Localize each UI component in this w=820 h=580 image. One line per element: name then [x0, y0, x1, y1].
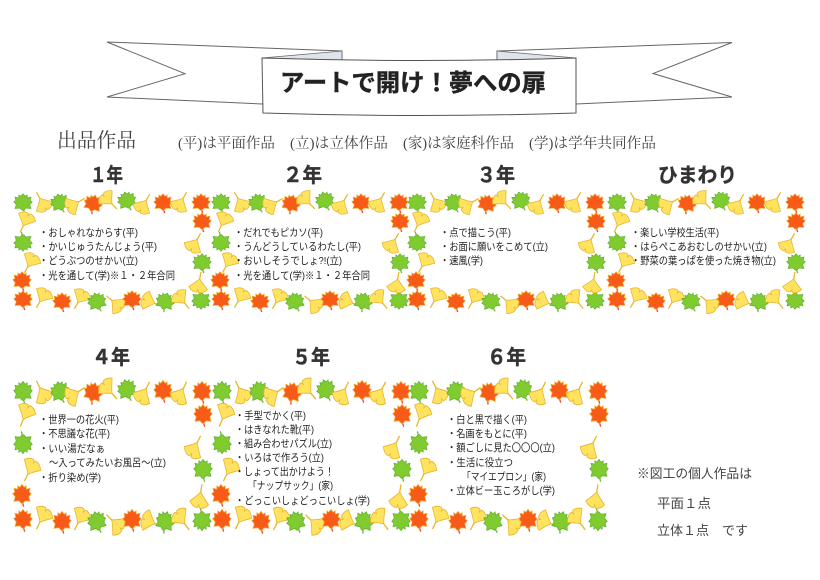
panel: 4年 — [12, 346, 212, 538]
work list: ・おしゃれなからす(平) — [39, 227, 138, 239]
banner front panel — [262, 58, 576, 116]
heading: ４年 — [92, 346, 130, 369]
work list: ～入ってみたいお風呂～(立) — [49, 456, 166, 469]
work list: ・点で描こう(平) — [440, 226, 511, 239]
work list: ・名画をもとに(平) — [447, 427, 527, 440]
work list — [234, 227, 370, 282]
work list: ・組み合わせパズル(立) — [235, 437, 332, 450]
work list: ・おいしそうでしょ?!(立) — [234, 254, 342, 267]
work list — [39, 227, 175, 282]
work list: ・生活に役立つ — [447, 456, 513, 469]
legend: work categories — [178, 134, 656, 152]
work list: ・世界一の花火(平) — [39, 413, 119, 426]
heading: １年 — [90, 164, 123, 187]
panel: 6年 — [408, 346, 608, 538]
panel: 5年 — [211, 346, 411, 538]
work list: ・うんどうしているわたし(平) — [234, 241, 361, 253]
work list: ・どっこいしょどっこいしょ(学) — [235, 494, 370, 507]
panel: 3年 — [406, 164, 605, 316]
work list: 「マイエプロン」(家) — [462, 470, 546, 483]
work list — [447, 413, 555, 497]
work list: ・いい湯だなぁ — [39, 443, 105, 455]
work list: ・立体ビー玉ころがし(学) — [447, 484, 555, 497]
work list: ・お面に願いをこめて(立) — [440, 240, 548, 253]
note: individual works: ※図工の個人作品は — [637, 466, 752, 481]
work list — [440, 226, 548, 267]
legend: work categories: (学)は学年共同作品 — [529, 134, 656, 152]
work list: ・光を通して(学)※１・２年合同 — [234, 269, 370, 282]
work list: ・手型でかく(平) — [235, 409, 306, 422]
work list: ・はきなれた靴(平) — [235, 423, 314, 436]
legend: work categories: (平)は平面作品 — [178, 135, 275, 152]
panel: 1年 — [12, 164, 211, 316]
heading: ６年 — [487, 346, 526, 369]
banner right tail — [497, 42, 732, 104]
leaf frame — [406, 188, 605, 316]
work list: ・白と黒で描く(平) — [447, 413, 527, 426]
legend: work categories: (家)は家庭科作品 — [403, 134, 514, 152]
work list: ・どうぶつのせかい(立) — [39, 254, 138, 267]
note: individual works: 平面１点 — [657, 496, 711, 511]
work list — [235, 409, 370, 507]
work list: ・速風(学) — [440, 254, 483, 267]
note: individual works: 立体１点 です — [657, 523, 748, 538]
work list: ・いろはで作ろう(立) — [235, 451, 324, 464]
leaf frame — [211, 375, 411, 538]
work list: ・野菜の葉っぱを使った焼き物(立) — [631, 254, 776, 267]
leaf frame — [210, 188, 409, 316]
heading: ２年 — [283, 164, 322, 187]
heading: ５年 — [292, 346, 330, 369]
panel: 2年 — [210, 164, 409, 316]
leaf frame — [12, 375, 212, 538]
title banner — [107, 42, 732, 116]
heading: ３年 — [477, 164, 515, 187]
work list: ・しょって出かけよう！ — [235, 466, 334, 478]
work list — [39, 413, 166, 484]
work list: ・額ごしに見た〇〇〇(立) — [447, 441, 555, 454]
work list: ・光を通して(学)※１・２年合同 — [39, 269, 175, 282]
banner left fold — [262, 51, 342, 60]
panel: ひまわり — [606, 164, 805, 316]
work list — [631, 226, 776, 267]
leaf frame — [408, 375, 608, 538]
section heading: 出品作品: 出品作品 — [57, 129, 136, 152]
legend: work categories: (立)は立体作品 — [290, 135, 388, 152]
banner left tail — [107, 42, 342, 104]
leaf frame — [12, 188, 211, 316]
note: individual works — [637, 466, 752, 538]
work list: ・楽しい学校生活(平) — [631, 226, 719, 239]
work list: ・折り染め(学) — [39, 471, 101, 484]
work list: 「ナップサック」(家) — [248, 479, 333, 492]
work list: ・だれでもピカソ(平) — [234, 227, 323, 239]
heading: ひまわり — [658, 164, 737, 187]
work list: ・はらぺこあおむしのせかい(立) — [631, 240, 767, 253]
banner right fold — [497, 51, 576, 60]
work list: ・かいじゅうたんじょう(平) — [39, 241, 157, 253]
work list: ・不思議な花(平) — [39, 427, 110, 440]
title: アートで開け！夢への扉 — [280, 70, 546, 97]
leaf frame — [606, 188, 805, 316]
